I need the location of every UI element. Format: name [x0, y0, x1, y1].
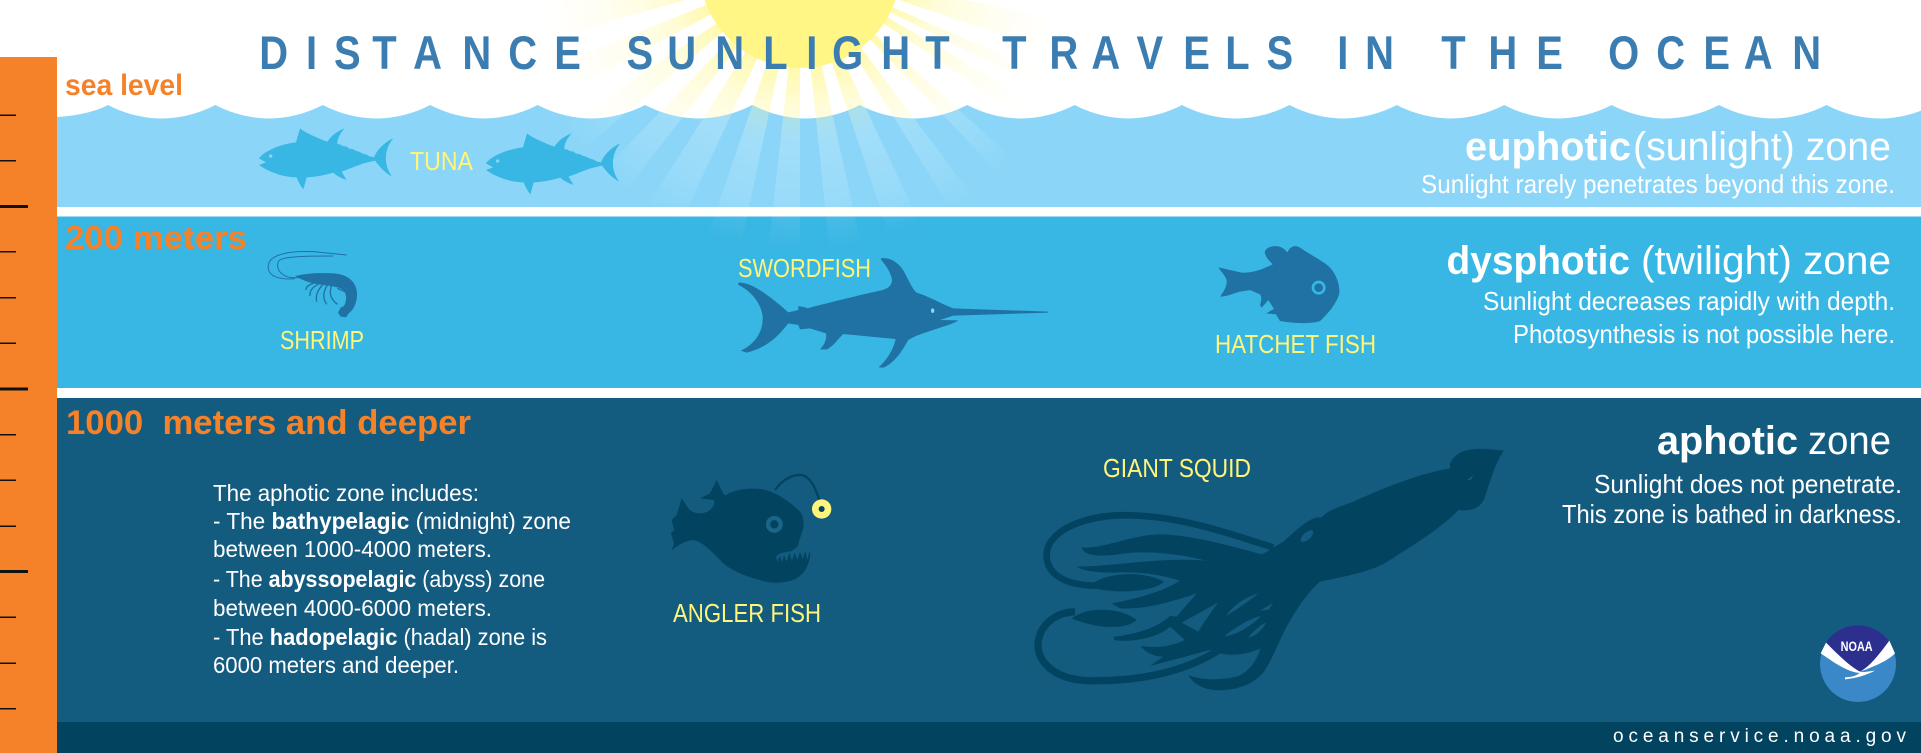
fish label: hatchet fish: HATCHET FISH	[1215, 329, 1376, 359]
text: euphotic zone: euphotic	[1465, 125, 1631, 169]
depth label: 1000 meters and deeper: 1000 meters and deeper	[66, 404, 471, 442]
text: aphotic zone: zone	[1808, 419, 1891, 463]
text: dysphotic zone: dysphotic	[1446, 239, 1630, 283]
icon: NOAA logo: NOAA	[1841, 638, 1873, 654]
panel: aphotic zone water	[57, 398, 1921, 722]
fish label: shrimp: SHRIMP	[280, 325, 364, 355]
text: euphotic zone: (sunlight) zone	[1633, 125, 1891, 169]
fish label: swordfish: SWORDFISH	[738, 253, 871, 283]
text block: aphotic zone includes: - The hadopelagic (hadal) zone is	[213, 624, 547, 650]
icon: giant squid	[1038, 449, 1504, 690]
icon: tuna right	[486, 133, 620, 194]
text: euphotic zone	[1421, 125, 1895, 199]
text: dysphotic zone	[1446, 239, 1895, 349]
text block: aphotic zone includes: 6000 meters and deeper.	[213, 652, 459, 678]
fish label: giant squid: GIANT SQUID	[1103, 453, 1251, 483]
sun rays above water	[473, 0, 1124, 297]
text block: aphotic zone includes: - The bathypelagic (midnight) zone	[213, 508, 571, 534]
fish label: angler fish: ANGLER FISH	[673, 598, 821, 628]
depth label: sea level: sea level	[65, 69, 183, 102]
icon: angler fish	[671, 475, 831, 583]
text: aphotic zone: Sunlight does not penetrate.	[1594, 469, 1902, 499]
icon: shrimp	[268, 252, 357, 317]
text block: aphotic zone includes	[213, 480, 571, 678]
text block: aphotic zone includes: between 4000-6000 meters.	[213, 595, 492, 621]
fish label: tuna: TUNA	[410, 146, 474, 176]
text: aphotic zone	[1562, 419, 1902, 529]
icon: hatchet fish	[1218, 246, 1339, 323]
depth ruler	[0, 57, 57, 753]
website url: oceanservice.noaa.gov	[1613, 726, 1906, 747]
text: dysphotic zone: (twilight) zone	[1641, 239, 1891, 283]
sun rays in water	[596, 105, 988, 234]
text: dysphotic zone: Photosynthesis is not possible here.	[1513, 319, 1895, 349]
panel: euphotic zone water	[57, 105, 1921, 207]
text: euphotic zone: Sunlight rarely penetrates beyond this zone.	[1421, 169, 1895, 199]
icon: swordfish	[738, 258, 1048, 368]
icon: NOAA logo	[1820, 625, 1896, 702]
sun	[699, 0, 901, 68]
text: dysphotic zone: Sunlight decreases rapidly with depth.	[1483, 286, 1895, 316]
panel: dysphotic zone water	[57, 216, 1921, 388]
depth label: 200 meters: 200 meters	[65, 219, 247, 256]
title: DISTANCE SUNLIGHT TRAVELS IN THE OCEAN	[259, 28, 1821, 80]
footer bar	[57, 722, 1921, 753]
text: aphotic zone: aphotic	[1657, 419, 1798, 463]
icon: tuna left	[259, 128, 393, 189]
text block: aphotic zone includes: - The abyssopelagic (abyss) zone	[213, 566, 545, 592]
text block: aphotic zone includes: The aphotic zone includes:	[213, 480, 479, 506]
text block: aphotic zone includes: between 1000-4000 meters.	[213, 536, 492, 562]
